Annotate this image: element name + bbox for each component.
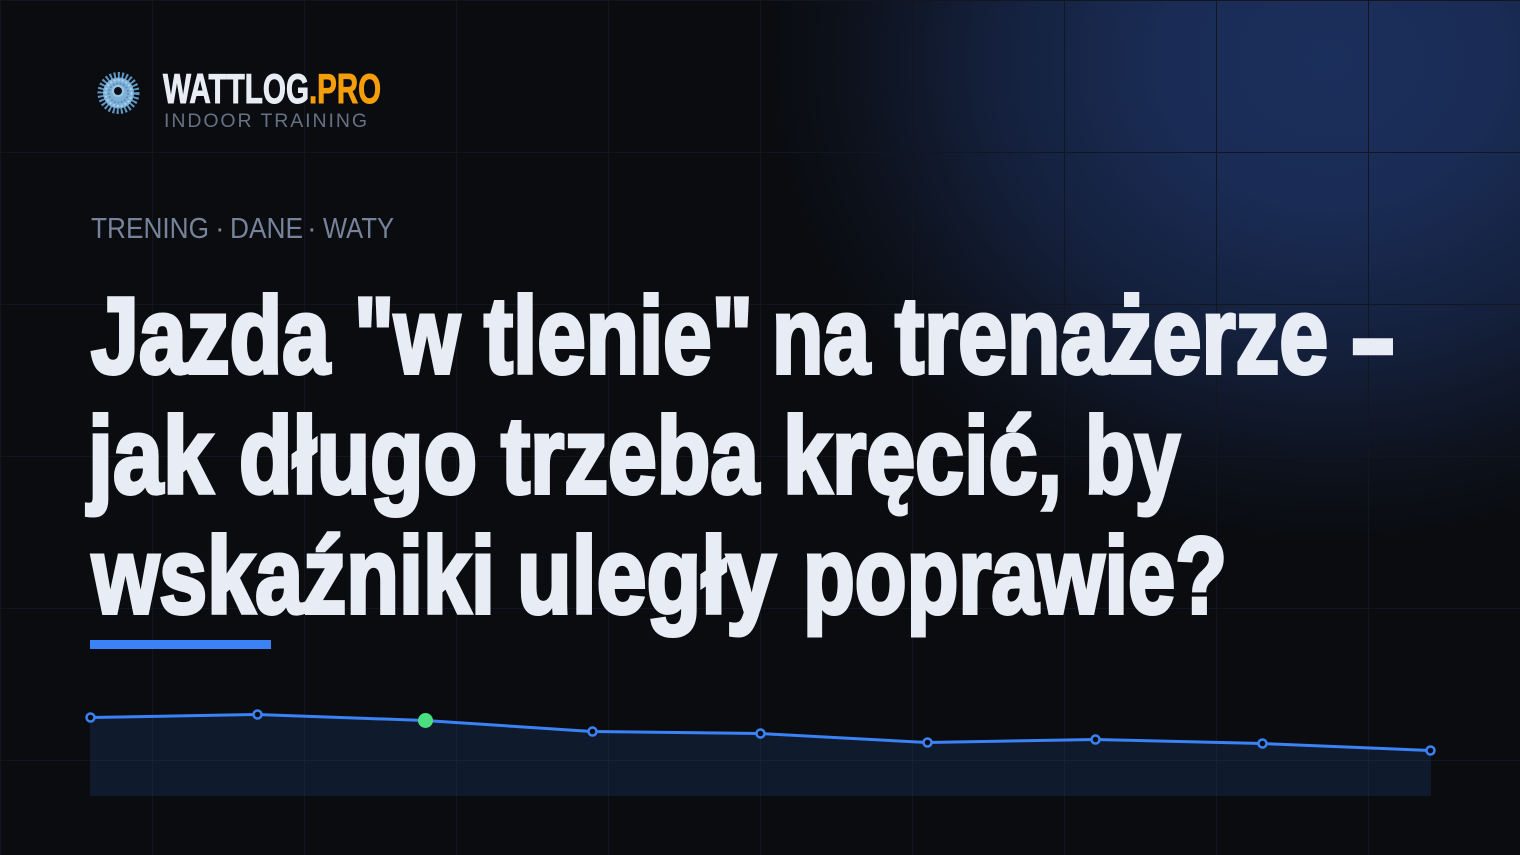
title: uległy <box>517 515 776 637</box>
title: "w <box>354 275 460 397</box>
title: trzeba <box>501 395 760 517</box>
title: kręcić, <box>783 395 1062 517</box>
highlighted marker <box>418 713 433 728</box>
brand name: .PRO <box>309 65 381 112</box>
icon: cassette gear <box>100 75 136 111</box>
title: długo <box>239 395 477 517</box>
title <box>86 275 1396 637</box>
eyebrow <box>91 213 394 245</box>
eyebrow: · <box>307 213 317 245</box>
eyebrow: · <box>215 213 225 245</box>
title: trenażerze <box>895 275 1328 397</box>
title: Jazda <box>91 275 331 397</box>
title: na <box>772 275 871 397</box>
eyebrow: WATY <box>323 213 394 245</box>
eyebrow: DANE <box>230 213 303 245</box>
title: poprawie? <box>803 515 1227 637</box>
title: - <box>1350 277 1396 399</box>
chart markers <box>86 710 1434 754</box>
chart line <box>90 714 1430 750</box>
title: jak <box>86 395 213 517</box>
line chart <box>86 710 1434 796</box>
logo <box>100 65 381 132</box>
brand name: WATTLOG <box>163 65 309 112</box>
chart area <box>90 714 1431 796</box>
title: wskaźniki <box>91 515 495 637</box>
eyebrow: TRENING <box>91 213 209 245</box>
title underline <box>90 640 271 649</box>
title: tlenie" <box>484 275 753 397</box>
brand tagline: INDOOR TRAINING <box>164 110 367 132</box>
title: by <box>1085 395 1180 517</box>
